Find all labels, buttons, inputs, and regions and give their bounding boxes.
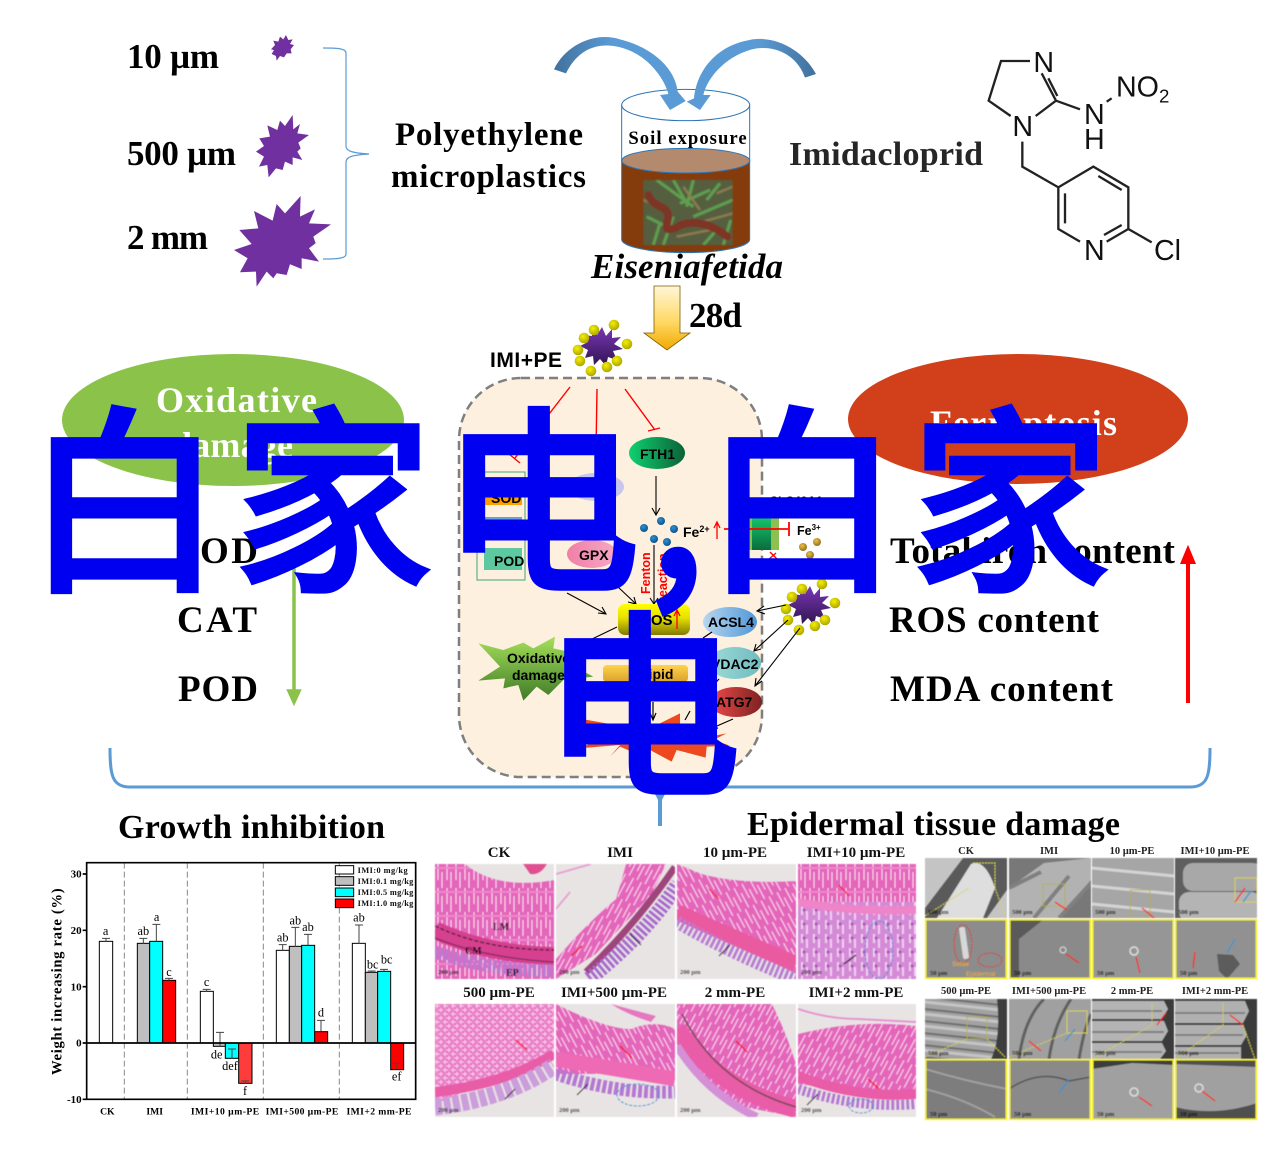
bar chart: weight increasing rate <box>50 863 416 1117</box>
histology titles: 500 µm-PE <box>463 985 535 1001</box>
box: ROS: ROS <box>640 612 673 629</box>
histology: IMI+10 um-PE: 200 µm <box>801 969 822 976</box>
x-axis labels <box>100 1106 411 1117</box>
histology titles: IMI <box>607 845 633 861</box>
arrow: 28 day exposure <box>644 286 690 350</box>
SEM overview: IMI <box>1009 858 1091 918</box>
enzyme: lavender oval <box>568 473 624 501</box>
x-axis labels: CK <box>100 1106 115 1117</box>
significance letters: ab <box>302 920 314 934</box>
burst: oxidative damage: Oxidative <box>507 650 570 666</box>
bars: IMI+500 um-PE <box>276 945 328 1043</box>
bracket <box>110 748 1210 826</box>
arrows toward ferroptosis <box>650 632 733 729</box>
bars: IMI+2 mm-PE <box>352 943 404 1070</box>
soil exposure beaker with earthworm <box>554 37 816 253</box>
chemical structure: imidacloprid: NO <box>1116 72 1159 104</box>
protein: FTH1 <box>629 437 685 469</box>
histology: IMI+500 um-PE: 200 µm <box>559 1107 580 1114</box>
SEM overview: 2 mm-PE: 500 µm <box>1095 1050 1116 1057</box>
significance letters: a <box>103 924 109 938</box>
significance letters: def <box>222 1059 239 1073</box>
ferric iron dots <box>799 538 821 559</box>
SEM titles: IMI+10 µm-PE <box>1181 846 1249 857</box>
x-axis labels: IMI+500 µm-PE <box>266 1106 338 1117</box>
inhibition: Fe3+ <box>724 522 789 536</box>
protein: ATG7: ATG7 <box>716 694 753 710</box>
SEM overview: 10 um-PE: 500 µm <box>1095 909 1116 916</box>
SEM overview: IMI+500 um-PE: 500 µm <box>1012 1050 1033 1057</box>
significance letters: c <box>166 965 172 979</box>
SEM overview: IMI+10 um-PE <box>1175 858 1263 922</box>
SEM detail: 2 mm-PE: 50 µm <box>1097 1111 1115 1118</box>
burst: ferroptosis <box>578 713 730 762</box>
SEM titles: 500 µm-PE <box>941 986 991 997</box>
SEM overview: 2 mm-PE <box>1092 999 1174 1059</box>
protein: ATG7 <box>710 687 762 717</box>
SEM overview: IMI+500 um-PE <box>1009 999 1091 1059</box>
significance letters: de <box>211 1047 223 1061</box>
SEM detail: IMI+2 mm-PE: 50 µm <box>1180 1111 1198 1118</box>
label: Fe3+: Fe <box>797 524 812 538</box>
histology: IMI+2 mm-PE <box>798 1004 916 1117</box>
box: lipid peroxidation: Lipid <box>640 666 673 682</box>
SEM detail: IMI+500 um-PE <box>1009 1059 1091 1120</box>
y-axis tick labels: 10 <box>71 981 82 993</box>
significance letters: ab <box>138 924 149 938</box>
significance letters: bc <box>367 957 379 971</box>
SEM detail: IMI+10 um-PE <box>1175 919 1257 979</box>
heading: polyethylene microplastics: microplastics <box>391 159 586 195</box>
SEM detail: 500 um-PE <box>925 1059 1007 1120</box>
ellipse: ferroptosis <box>848 354 1188 484</box>
enzyme box: SOD: SOD <box>491 490 521 506</box>
histology: 2 mm-PE: 200 µm <box>680 1107 701 1114</box>
inhibition lines from IMI+PE <box>509 387 660 463</box>
histology: 500 um-PE: 200 µm <box>438 1107 459 1114</box>
label: Fenton reaction: reaction <box>656 553 670 602</box>
SEM detail: 500 um-PE: 50 µm <box>930 1111 948 1118</box>
SEM titles: IMI+500 µm-PE <box>1012 986 1086 997</box>
chemical structure: imidacloprid: 2 <box>1159 86 1169 107</box>
label: 2 mm: 2 mm <box>127 218 208 257</box>
list: decreased enzymes: CAT <box>177 600 257 641</box>
histology titles: IMI+2 mm-PE <box>809 985 903 1001</box>
watermark text: 白家电, <box>26 346 715 633</box>
SEM titles: CK <box>958 846 975 857</box>
arrow: imidacloprid into soil <box>687 39 816 110</box>
plot frame and ticks <box>83 863 416 1099</box>
label: Fenton reaction <box>639 552 670 602</box>
chemical structure: imidacloprid: N <box>1084 235 1105 267</box>
list: increased contents: Total iron content <box>890 531 1176 572</box>
SEM detail: CK <box>925 919 1007 979</box>
significance letters: c <box>204 975 210 989</box>
error bars <box>102 924 401 1083</box>
chemical structure: imidacloprid: Cl <box>1154 235 1181 267</box>
legend: IMI:1.0 mg/kg <box>358 899 414 908</box>
x-axis labels: IMI+10 µm-PE <box>191 1106 259 1117</box>
SEM detail: IMI+2 mm-PE <box>1175 1059 1257 1120</box>
icon: IMI+PE complex (right) <box>781 579 840 635</box>
SEM detail: CK: Setae <box>952 961 969 968</box>
SEM titles: 10 µm-PE <box>1110 846 1154 857</box>
SEM overview: IMI+2 mm-PE <box>1175 999 1257 1059</box>
ellipse: oxidative damage <box>62 354 404 486</box>
ellipse: oxidative damage: Oxidative <box>156 380 317 420</box>
SEM detail: IMI+10 um-PE: 50 µm <box>1180 970 1198 977</box>
label: imidacloprid: Imidacloprid <box>789 136 983 173</box>
SEM detail: 10 um-PE: 50 µm <box>1097 970 1115 977</box>
brace <box>323 48 369 259</box>
label: 28d: 28d <box>689 296 743 335</box>
SEM titles: 2 mm-PE <box>1111 986 1153 997</box>
label: Fe3+: 3+ <box>812 523 821 532</box>
label: Fe2+: 2+ <box>699 524 710 534</box>
label: IMI+PE: IMI+PE <box>490 349 562 372</box>
ellipse: ferroptosis: Ferroptosis <box>930 403 1117 443</box>
histology: CK: 200 µm <box>438 969 459 976</box>
histology: CK <box>435 864 554 979</box>
SEM detail: 10 um-PE <box>1092 919 1174 979</box>
ellipse: oxidative damage: damage <box>172 425 293 465</box>
histology: IMI: 200 µm <box>559 969 580 976</box>
significance letters: bc <box>381 952 393 966</box>
legend <box>335 866 414 908</box>
watermark text: 白家 <box>703 346 1119 633</box>
SEM titles: IMI <box>1040 846 1058 857</box>
arrows from complex to proteins <box>754 605 800 686</box>
legend: IMI:0.1 mg/kg <box>358 877 414 886</box>
enzyme: GPX: GPX <box>579 547 609 563</box>
icon: IMI+PE complex <box>573 320 632 376</box>
histology: 500 um-PE <box>435 1004 554 1117</box>
histology titles: 10 µm-PE <box>703 845 767 861</box>
histology: 10 um-PE: 200 µm <box>680 969 701 976</box>
list: increased contents: MDA content <box>890 669 1114 710</box>
significance letters <box>103 910 402 1098</box>
bars: IMI+10 um-PE <box>200 991 252 1083</box>
watermark text: 电 <box>542 550 750 837</box>
arrow: decrease <box>289 560 299 702</box>
significance letters: a <box>154 910 160 924</box>
y-axis tick labels: -10 <box>67 1094 82 1106</box>
heading: polyethylene microplastics <box>391 117 586 195</box>
histology: IMI+10 um-PE <box>798 864 916 979</box>
histology: 10 um-PE <box>677 864 796 979</box>
SEM titles <box>941 846 1249 997</box>
heading: polyethylene microplastics: Polyethylene <box>395 117 583 153</box>
y-axis tick labels <box>67 869 82 1106</box>
legend: IMI:0 mg/kg <box>358 866 408 875</box>
burst: oxidative damage: damage <box>512 667 565 683</box>
channel: SLC40A1 <box>748 494 823 550</box>
label: 500 um: 500 µm <box>127 134 236 173</box>
significance letters: ab <box>277 931 288 945</box>
protein: FTH1: FTH1 <box>640 446 675 462</box>
x-axis labels: IMI+2 mm-PE <box>346 1106 411 1117</box>
list: decreased enzymes: POD <box>178 669 258 710</box>
channel: SLC40A1: SLC40A1 <box>770 494 823 508</box>
arrow: FTH1 to iron <box>652 476 660 515</box>
x-axis labels: IMI <box>146 1106 163 1117</box>
list: decreased enzymes: SOD <box>177 531 258 572</box>
significance letters: f <box>243 1084 248 1098</box>
histology: CK: CM <box>465 946 482 957</box>
chemical structure: imidacloprid: H <box>1084 124 1105 156</box>
panel: cell mechanism <box>459 378 823 777</box>
enzyme box: POD <box>484 548 524 570</box>
arrow: microplastics into soil <box>554 37 686 110</box>
icon: large microplastic particle <box>234 196 331 287</box>
arrow: increase <box>1183 550 1193 703</box>
y-axis title: Weight increasing rate (%) <box>50 888 66 1075</box>
histology titles: 2 mm-PE <box>705 985 765 1001</box>
chemical structure: imidacloprid <box>989 47 1181 267</box>
chemical structure: imidacloprid: N <box>1084 99 1105 131</box>
zero line <box>87 1040 416 1045</box>
enzyme box: SOD <box>477 472 525 580</box>
significance letters: ab <box>290 913 301 927</box>
photo: earthworm <box>643 180 733 245</box>
histology: 2 mm-PE <box>677 1004 796 1117</box>
SEM overview: IMI+10 um-PE: 500 µm <box>1178 909 1199 916</box>
histology: IMI+500 um-PE <box>556 1004 675 1117</box>
SEM overview: CK <box>925 858 1007 918</box>
SEM overview: 500 um-PE: 500 µm <box>928 1050 949 1057</box>
arrows into ROS <box>567 545 658 640</box>
ferrous iron dots <box>640 517 678 546</box>
box: ROS <box>618 604 690 635</box>
histology titles <box>463 845 905 1001</box>
protein: ACSL4: ACSL4 <box>708 614 754 630</box>
SEM detail: IMI+500 um-PE: 50 µm <box>1014 1111 1032 1118</box>
SEM detail: CK: 50 µm <box>930 970 948 977</box>
list: increased contents: ROS content <box>889 600 1100 641</box>
chemical structure: imidacloprid: N <box>1033 47 1054 79</box>
significance letters: ab <box>353 911 365 925</box>
list: decreased enzymes <box>177 531 258 710</box>
SEM titles: IMI+2 mm-PE <box>1182 986 1248 997</box>
particle sizes panel <box>127 35 369 287</box>
significance letters: ef <box>392 1070 402 1084</box>
list: increased contents <box>889 531 1176 710</box>
label: Fe2+: Fe <box>683 524 699 540</box>
burst: oxidative damage <box>478 637 593 701</box>
histology: IMI <box>556 864 678 979</box>
SEM overview: 500 um-PE <box>925 999 1007 1059</box>
SEM detail: IMI: 50 µm <box>1014 970 1032 977</box>
heading: growth inhibition: Growth inhibition <box>118 809 385 846</box>
histology: IMI+2 mm-PE: 200 µm <box>801 1107 822 1114</box>
label: Fenton reaction: Fenton <box>639 552 653 594</box>
enzyme box: POD: POD <box>494 553 524 569</box>
watermark text <box>26 346 1119 837</box>
label: Eisenia fetida: Eiseniafetida <box>590 247 783 286</box>
legend: IMI:0.5 mg/kg <box>358 888 414 897</box>
significance letters: d <box>318 1006 325 1020</box>
SEM overview: IMI: 500 µm <box>1012 909 1033 916</box>
y-axis tick labels: 0 <box>76 1038 82 1050</box>
histology titles: IMI+500 µm-PE <box>561 985 667 1001</box>
histology: CK: LM <box>493 922 510 933</box>
y-axis tick labels: 30 <box>71 869 82 881</box>
enzyme: GPX <box>567 540 617 568</box>
histology: CK: EP <box>506 968 519 979</box>
SEM overview: IMI+2 mm-PE: 500 µm <box>1178 1050 1199 1057</box>
SEM overview: CK: 500 µm <box>928 909 949 916</box>
histology titles: CK <box>488 845 511 861</box>
bars: IMI <box>137 941 176 1043</box>
label: soil exposure: Soil exposure <box>628 128 747 149</box>
y-axis tick labels: 20 <box>71 925 82 937</box>
chemical structure: imidacloprid: N <box>1012 111 1033 143</box>
protein: VDAC2 <box>709 647 761 679</box>
icon: medium microplastic particle <box>256 115 309 177</box>
histology titles: IMI+10 µm-PE <box>807 845 905 861</box>
protein: VDAC2: VDAC2 <box>711 656 759 672</box>
icon: small microplastic particle <box>271 35 294 61</box>
bars: CK <box>99 941 113 1043</box>
box: lipid peroxidation <box>603 665 688 682</box>
label: 10 um: 10 µm <box>127 37 219 76</box>
SEM detail: IMI <box>1009 919 1091 979</box>
SEM detail: CK: Epidermal <box>966 971 996 978</box>
heading: epidermal tissue damage: Epidermal tissue damage <box>747 806 1120 843</box>
protein: ACSL4 <box>703 607 757 637</box>
SEM overview: 10 um-PE <box>1092 858 1174 918</box>
SEM detail: 2 mm-PE <box>1092 1059 1174 1120</box>
arrow: Fe2+ up <box>714 522 720 539</box>
